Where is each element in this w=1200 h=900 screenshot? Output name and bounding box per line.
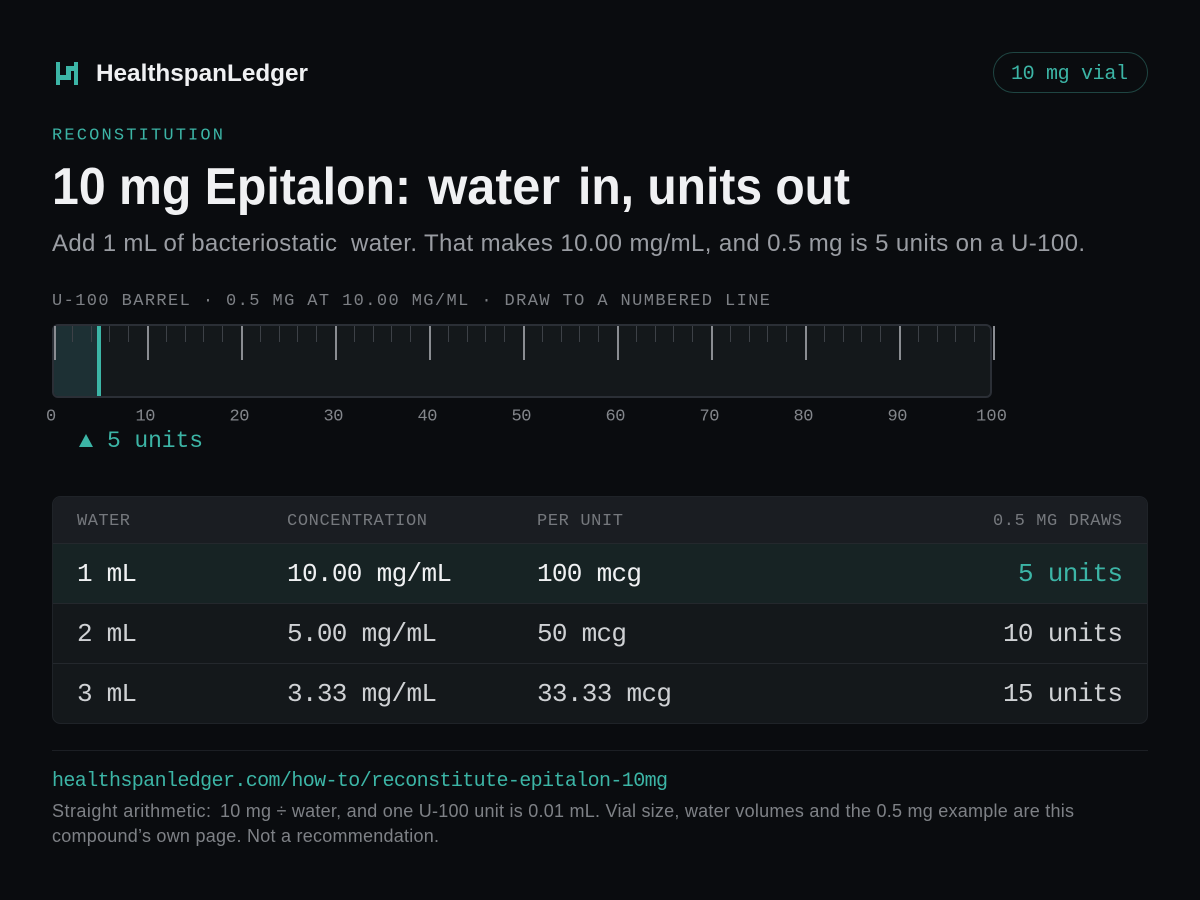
row: 2 mL: 5.00 mg/mL [287,619,437,649]
footer note: compound’s own page. Not a recommendation. [52,826,439,846]
brand name: HealthspanLedger [96,60,308,87]
row: 3 mL: 33.33 mcg [537,679,672,709]
title: water [427,158,560,216]
row: 3 mL: 15 units [1003,679,1123,709]
scale labels: 0 [46,408,56,426]
subtitle: water. That makes 10.00 mg/mL, and 0.5 mg is 5 units on a U-100. [350,230,1085,257]
title: 10 mg Epitalon: [52,158,411,216]
title: in, units out [578,158,850,216]
dose callout: 5 units [107,428,203,454]
dose marker [97,326,101,396]
table: water volumes [52,496,1148,724]
row: 2 mL: 2 mL [77,619,137,649]
row: 2 mL [77,619,1123,649]
minor ticks [72,326,974,342]
syringe caption: U-100 BARREL · 0.5 MG AT 10.00 MG/ML · DRAW TO A NUMBERED LINE [52,292,770,311]
subtitle: Add 1 mL of bacteriostatic [52,230,337,257]
icon: brand logo [56,62,78,85]
scale labels: 80 [794,408,814,426]
footer note: Straight arithmetic: [52,801,211,821]
row: 3 mL [77,679,1123,709]
badge: vial size: 10 mg vial [1011,63,1128,86]
table frame [52,496,1148,724]
filled dose region [54,326,97,396]
scale labels: 90 [888,408,908,426]
scale labels [46,408,1007,426]
title [52,158,850,216]
scale labels: 10 [136,408,156,426]
table header row: WATER [77,512,130,531]
chart: syringe barrel gauge [46,325,1007,426]
barrel [53,325,991,397]
row: 3 mL: 3 mL [77,679,137,709]
highlighted row: 1 mL: 10.00 mg/mL [287,559,452,589]
row: 3 mL: 3.33 mg/mL [287,679,437,709]
row: 2 mL: 10 units [1003,619,1123,649]
major ticks [55,326,994,360]
scale labels: 70 [700,408,720,426]
footer note: 10 mg ÷ water, and one U-100 unit is 0.01 mL. Vial size, water volumes and the 0.5 mg example are this [220,801,1074,821]
highlighted row: 1 mL: 5 units [1018,559,1123,589]
highlighted row: 1 mL: 1 mL [77,559,137,589]
badge: vial size [994,52,1148,92]
header: brand [56,60,308,87]
footer note [52,801,1074,846]
scale labels: 50 [512,408,532,426]
table header row: CONCENTRATION [287,512,427,531]
table header row: 0.5 MG DRAWS [993,512,1122,531]
scale labels: 100 [976,408,1007,426]
table header row: PER UNIT [537,512,623,531]
highlighted row: 1 mL [53,544,1147,603]
row: 2 mL: 50 mcg [537,619,627,649]
footer source link: healthspanledger.com/how-to/reconstitute-epitalon-10mg [52,770,668,793]
icon: pointer triangle [79,434,93,447]
scale labels: 60 [606,408,626,426]
highlighted row: 1 mL: 100 mcg [537,559,642,589]
eyebrow: RECONSTITUTION [52,126,223,146]
scale labels: 20 [230,408,250,426]
scale labels: 30 [324,408,344,426]
scale labels: 40 [418,408,438,426]
table header row [53,497,1147,544]
